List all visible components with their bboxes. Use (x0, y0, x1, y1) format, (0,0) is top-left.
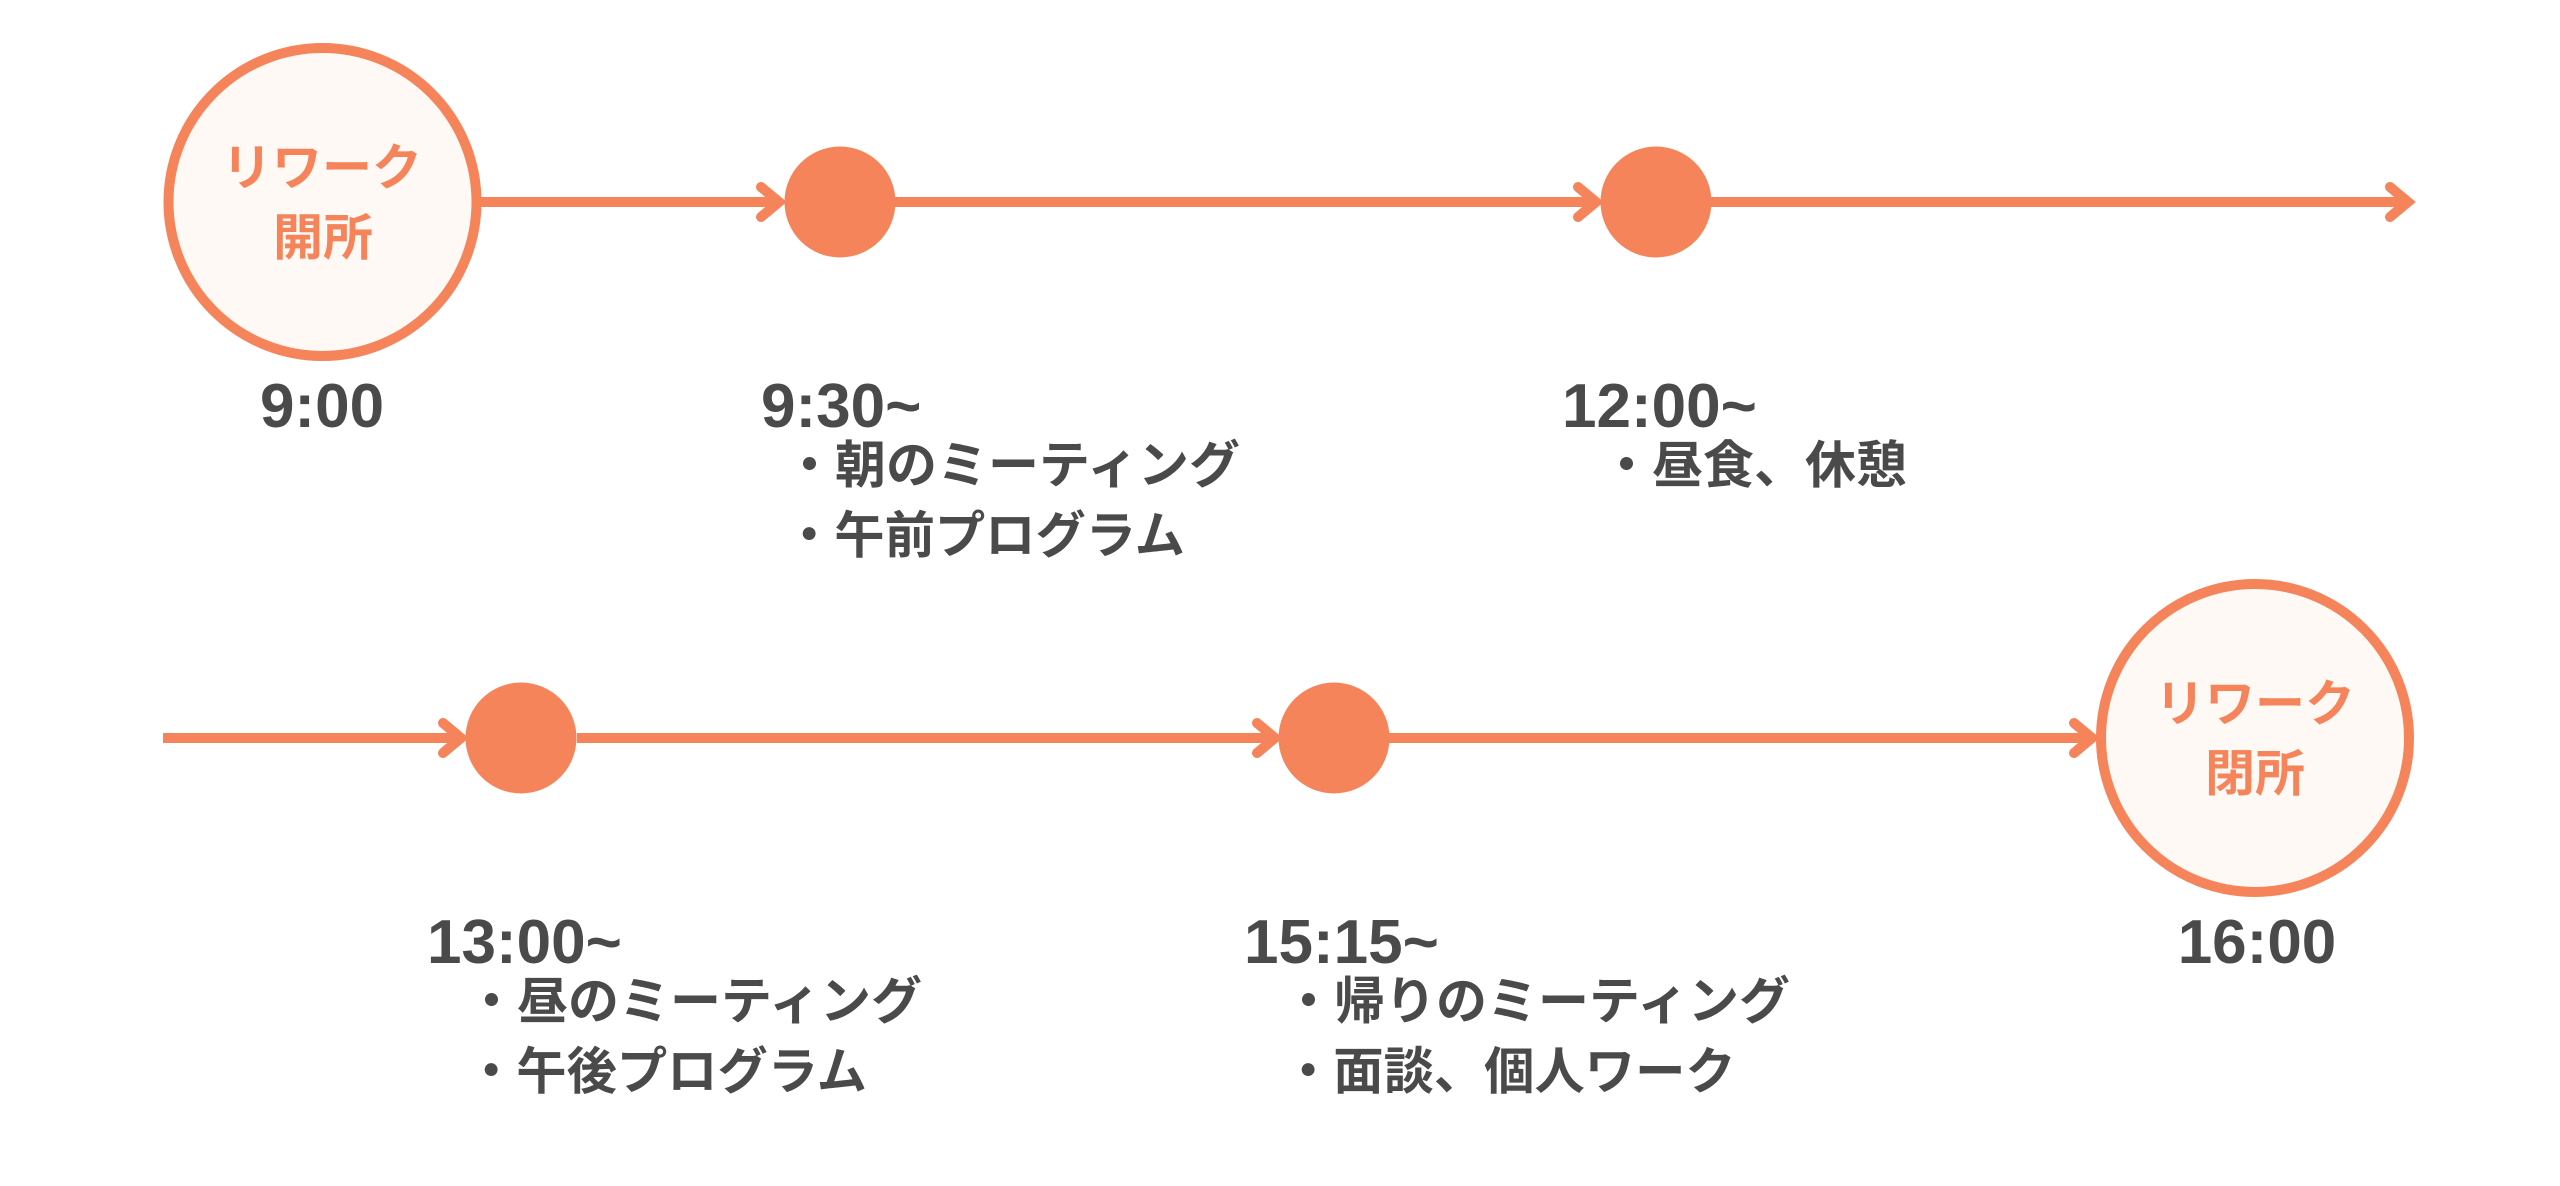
text block: 9:30 schedule: 9:30~ (761, 372, 921, 441)
arrow: 13:00 to 15:15 (577, 723, 1275, 753)
text block: 12:00 schedule (1562, 372, 1907, 494)
node: opening circle (168, 48, 476, 356)
text block: 15:15 schedule: ・帰りのミーティング (1283, 973, 1790, 1030)
arrow: 9:30 to 12:00 (895, 187, 1597, 217)
text block: 13:00 schedule: 13:00~ (427, 908, 622, 977)
text block: 13:00 schedule: ・昼のミーティング (466, 973, 922, 1030)
node: closing circle: リワーク (2155, 676, 2355, 732)
text block: 15:15 schedule: ・面談、個人ワーク (1283, 1043, 1736, 1100)
node: closing circle: 閉所 (2205, 746, 2305, 802)
time label: 16:00: 16:00 (2178, 908, 2336, 977)
arrow: 12:00 onward (1711, 187, 2408, 217)
text block: 12:00 schedule: 12:00~ (1562, 372, 1757, 441)
node: 12:00 dot (1600, 146, 1712, 258)
node: closing circle (2101, 584, 2409, 892)
text block: 9:30 schedule: ・午前プログラム (784, 507, 1185, 564)
text block: 15:15 schedule (1244, 908, 1790, 1100)
timeline row 2 (163, 584, 2409, 892)
arrow: into 13:00 (163, 723, 461, 753)
arrow: opening to 9:30 (481, 187, 780, 217)
text block: 15:15 schedule: 15:15~ (1244, 908, 1439, 977)
text block: 13:00 schedule (427, 908, 922, 1100)
node: 15:15 dot (1278, 682, 1390, 794)
node: opening circle: リワーク (222, 140, 422, 196)
node: 9:30 dot (784, 146, 896, 258)
text block: 13:00 schedule: ・午後プログラム (466, 1043, 867, 1100)
timeline row 1 (168, 48, 2408, 356)
node: opening circle: 開所 (273, 210, 373, 266)
node: 13:00 dot (466, 682, 576, 794)
text block: 9:30 schedule (761, 372, 1240, 564)
text block: 9:30 schedule: ・朝のミーティング (784, 437, 1240, 494)
text block: 12:00 schedule: ・昼食、休憩 (1601, 437, 1907, 494)
time label: 9:00: 9:00 (260, 372, 384, 441)
arrow: 15:15 to closing (1389, 723, 2092, 753)
